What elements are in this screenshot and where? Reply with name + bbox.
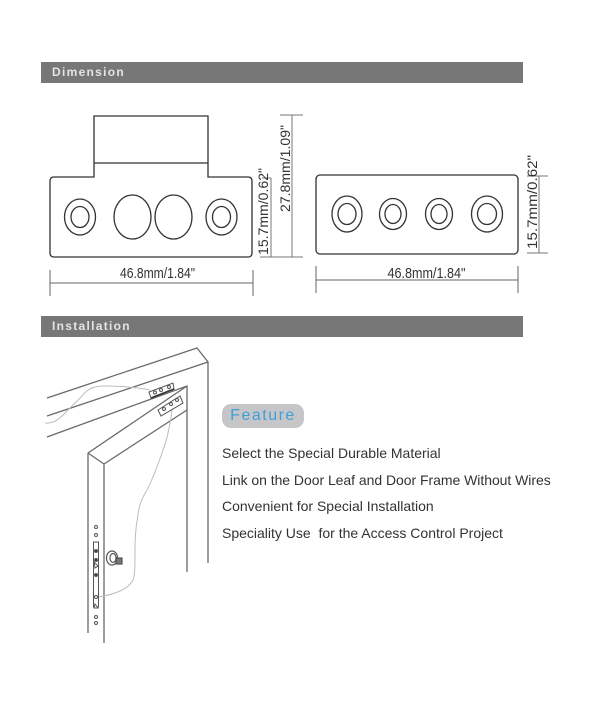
- feature line 2: Link on the Door Leaf and Door Frame Without Wires: [222, 472, 551, 488]
- dimension: right width: 46.8mm/1.84": [388, 265, 466, 282]
- dimension: left heights: 15.7mm/0.62": [255, 168, 271, 255]
- dimension: right height: 15.7mm/0.62": [524, 155, 540, 249]
- diagram: left sensor with housing: [50, 116, 252, 257]
- dimension: left heights: [255, 115, 303, 257]
- door sensors: [149, 383, 183, 416]
- mortise lock: [94, 526, 98, 624]
- dimension: left heights: 27.8mm/1.09": [277, 125, 293, 212]
- feature badge: [222, 404, 304, 428]
- feature line 3: Convenient for Special Installation: [222, 498, 434, 514]
- feature line 1: Select the Special Durable Material: [222, 445, 441, 461]
- heading: Dimension: Dimension: [52, 65, 125, 79]
- feature line 4: Speciality Use for the Access Control Project: [222, 525, 503, 541]
- feature badge: Feature: [230, 407, 296, 424]
- heading: Installation: [41, 316, 523, 337]
- door knob: [106, 551, 122, 565]
- heading: Dimension: [41, 62, 523, 83]
- dimension: right height: [524, 155, 548, 253]
- diagram: right sensor: [316, 175, 518, 254]
- heading: Installation: Installation: [52, 319, 131, 333]
- dimension: right width: [316, 265, 518, 293]
- door frame and leaf: [47, 348, 208, 643]
- illustration: door and frame: [45, 348, 208, 643]
- dimension: left width: [50, 265, 253, 296]
- dimension: left width: 46.8mm/1.84": [120, 265, 195, 282]
- wires: [45, 386, 172, 597]
